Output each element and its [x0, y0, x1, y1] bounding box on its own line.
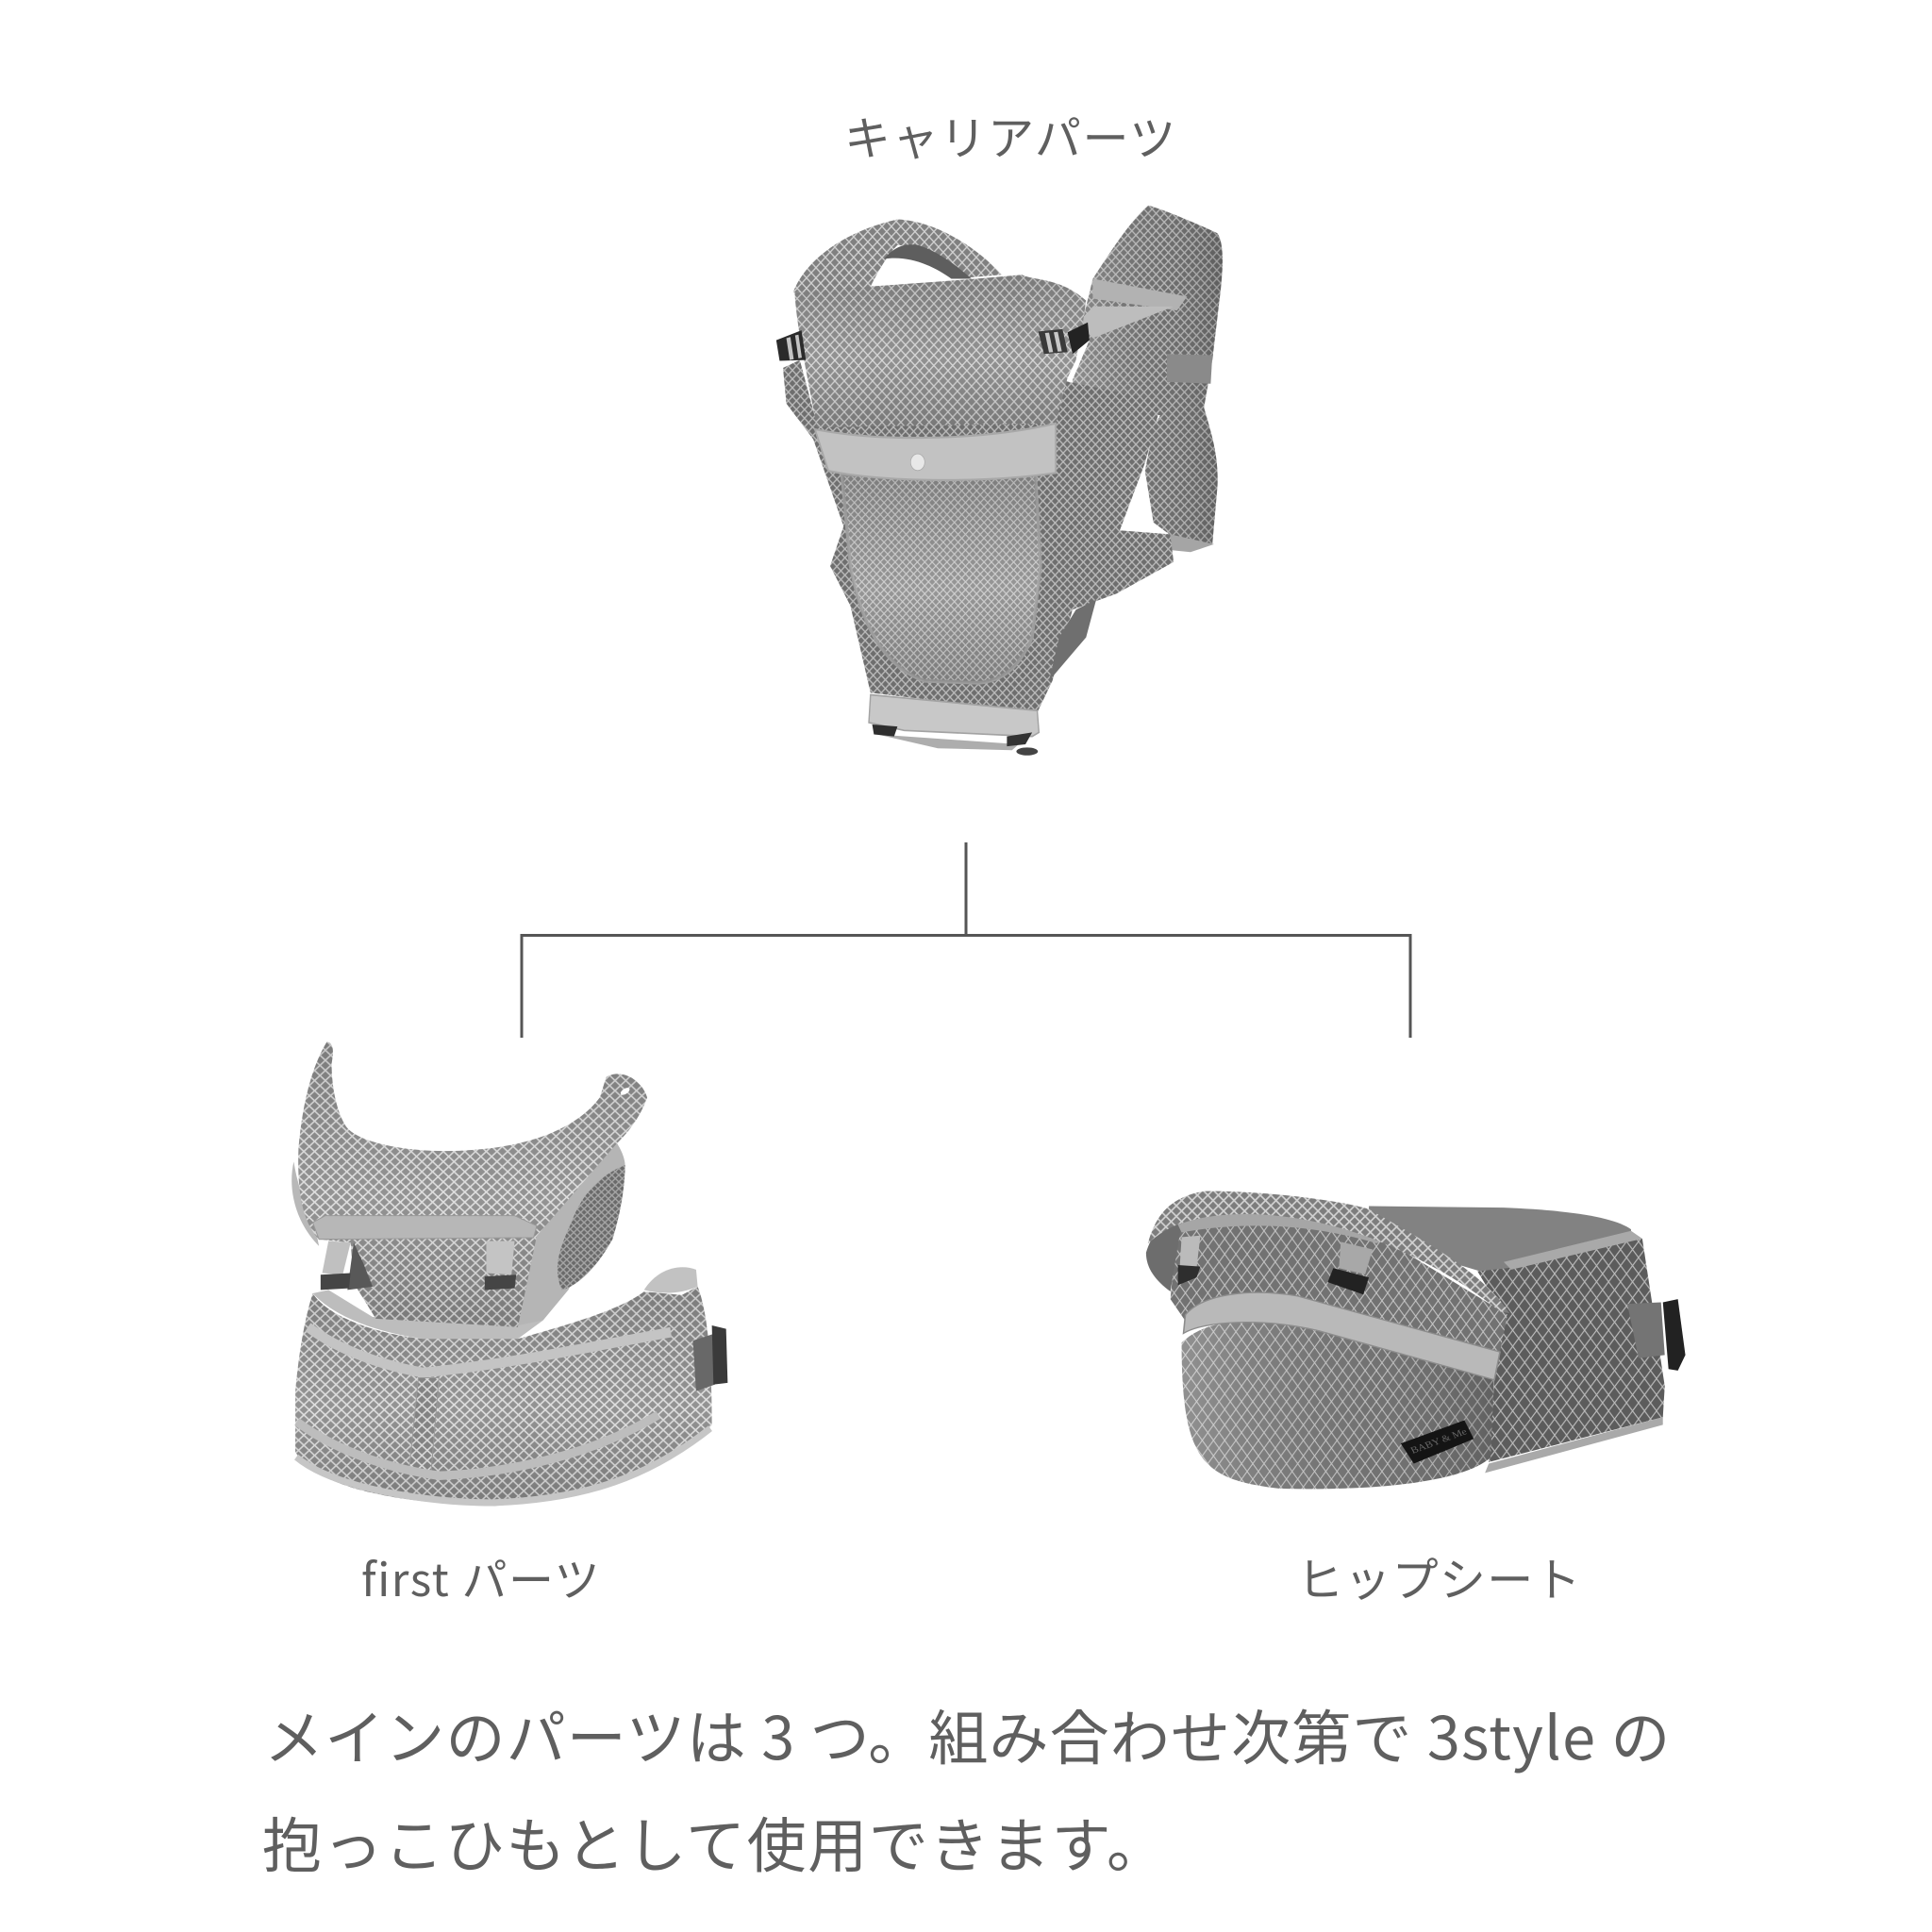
left buckle	[776, 330, 806, 360]
bib panel	[298, 1041, 647, 1327]
label: hip seat: ヒップシート	[1297, 1543, 1582, 1610]
brand label: BABY & Me	[1409, 1426, 1469, 1456]
description text	[262, 1691, 1672, 1885]
zipper band	[1184, 1292, 1500, 1380]
zipper band	[312, 1216, 537, 1240]
tabs and clips	[1178, 1236, 1373, 1294]
front pocket	[841, 475, 1041, 683]
waist belt	[295, 1267, 712, 1507]
title: carrier part: キャリアパーツ	[844, 102, 1177, 169]
inner mesh pad	[516, 1141, 625, 1327]
description text: 抱っこひもとして使用できます。	[262, 1799, 1168, 1885]
top zipper band	[1178, 1214, 1380, 1243]
head support handle	[793, 219, 1002, 292]
illustration: carrier part	[776, 206, 1223, 756]
dark underside	[1049, 600, 1096, 681]
connector lines	[522, 842, 1410, 1038]
flap dark underside	[1146, 1223, 1182, 1291]
dark shadow beneath tab	[347, 1242, 373, 1290]
upper panel	[1171, 1203, 1507, 1361]
right buckle	[1039, 323, 1090, 354]
belt rim behind the bib	[312, 1290, 543, 1339]
brand label	[1401, 1420, 1474, 1464]
label: first part: first パーツ	[361, 1543, 601, 1609]
illustration: hip seat	[1146, 1191, 1686, 1489]
bottom fabric and clips	[869, 694, 1039, 756]
side buckle	[693, 1325, 727, 1391]
front pocket	[1182, 1322, 1494, 1489]
left fabric edge	[291, 1161, 319, 1246]
tabs and clips	[321, 1241, 516, 1290]
right body	[1477, 1231, 1665, 1473]
front mesh panel	[794, 275, 1086, 427]
back shoulder strap	[1073, 206, 1223, 552]
flap top arc	[1148, 1191, 1509, 1313]
side buckle	[1627, 1299, 1686, 1371]
inner back pad	[1369, 1206, 1631, 1280]
illustration: first part	[291, 1041, 727, 1507]
fabric band with snap	[815, 424, 1056, 480]
side mesh body	[783, 360, 1174, 712]
description text: メインのパーツは 3 つ。組み合わせ次第で 3style の	[264, 1691, 1672, 1777]
